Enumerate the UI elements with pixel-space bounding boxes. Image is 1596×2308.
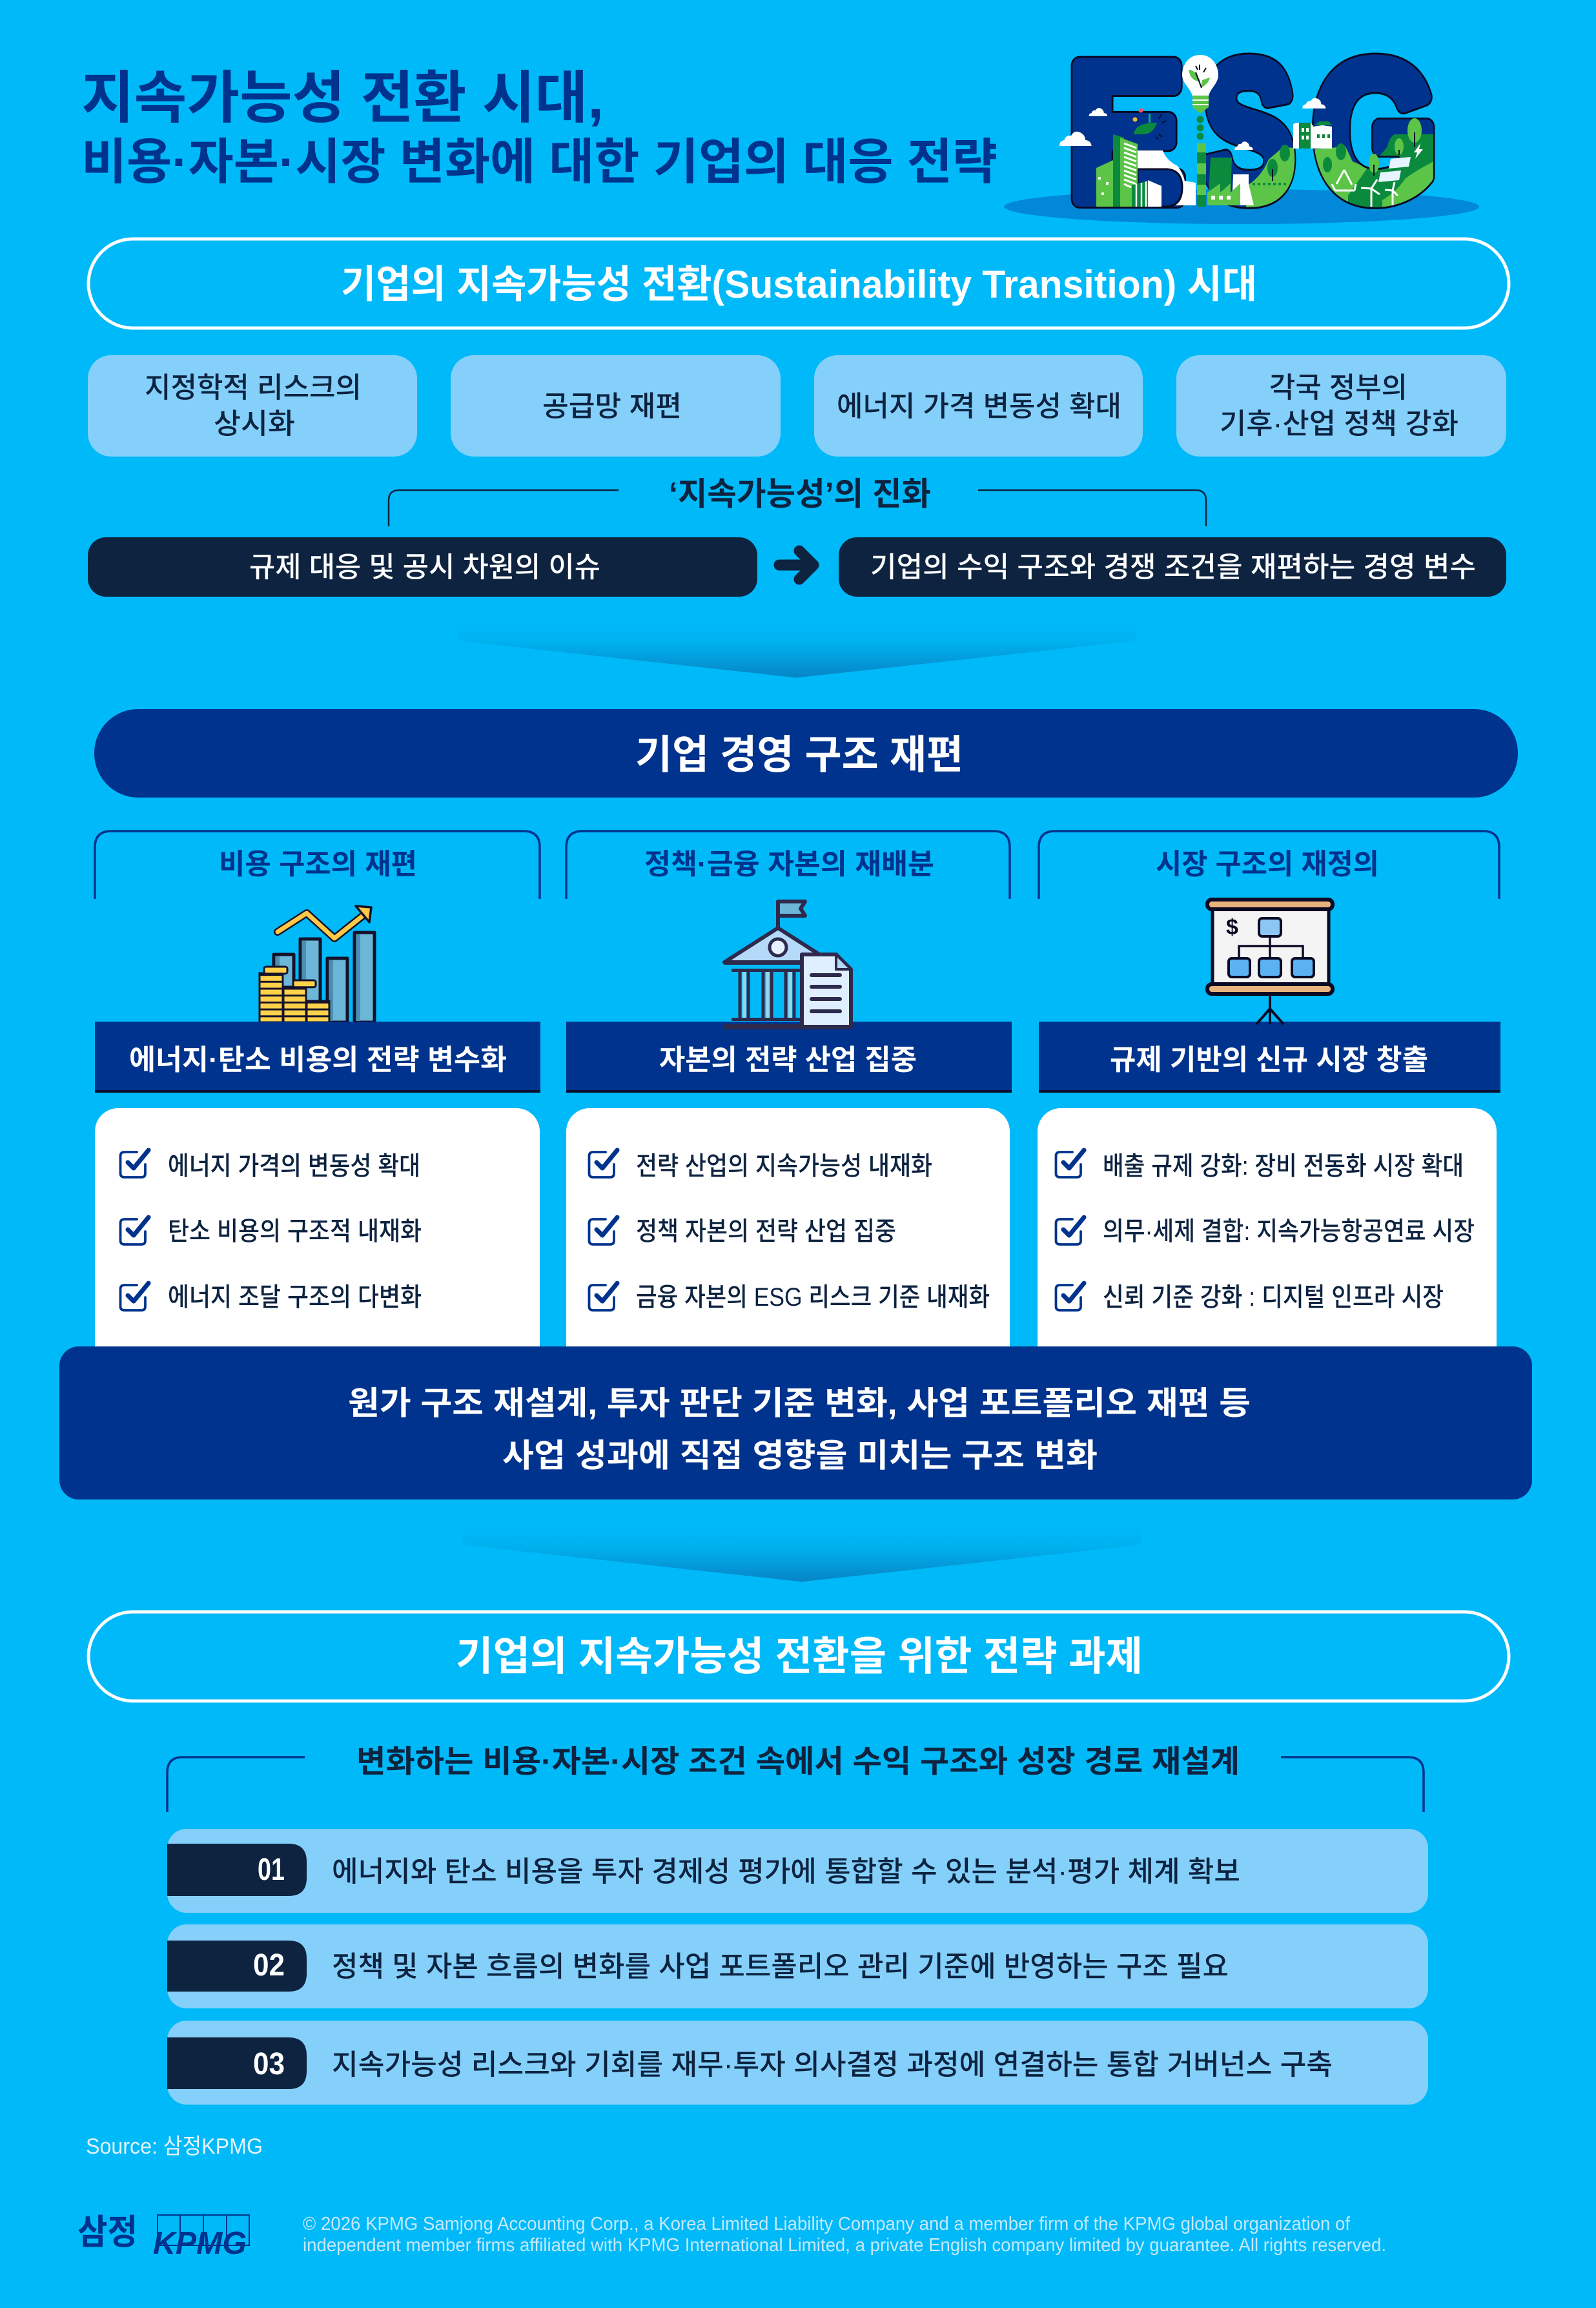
icon: presentation board org chart: $ xyxy=(1226,915,1238,940)
title: 지속가능성 전환 시대, xyxy=(81,66,604,130)
panel: government policy xyxy=(1176,355,1506,457)
heading: evolution of sustainability with bracket xyxy=(389,476,1206,526)
checklist: market: 신뢰 기준 강화 : 디지털 인프라 시장 xyxy=(1103,1283,1444,1312)
icon: ESG illustration: S xyxy=(1203,23,1294,240)
panel: management variable: 기업의 수익 구조와 경쟁 조건을 재편하는 경영 변수 xyxy=(870,551,1476,583)
panel: regulatory issue xyxy=(88,537,757,597)
icon: ESG illustration: G xyxy=(1313,23,1437,240)
checklist: market xyxy=(1038,1108,1497,1379)
checklist: capital: 정책 자본의 전략 산업 집중 xyxy=(636,1217,896,1246)
arrow: downward funnel 2 xyxy=(462,1527,1141,1582)
strip: energy carbon cost: 에너지·탄소 비용의 전략 변수화 xyxy=(129,1044,507,1076)
panel: government policy: 기후·산업 정책 강화 xyxy=(1220,408,1458,440)
panel: market redefinition column xyxy=(1038,831,1500,1379)
houses xyxy=(1293,121,1332,149)
column bracket and heading: 시장 구조의 재정의 xyxy=(1156,849,1379,880)
arrow xyxy=(779,551,813,579)
number tab 03 xyxy=(167,2037,307,2089)
checklist: market: 의무·세제 결합: 지속가능항공연료 시장 xyxy=(1103,1217,1475,1246)
checklist: cost: 탄소 비용의 구조적 내재화 xyxy=(168,1217,422,1246)
trees xyxy=(1267,118,1422,181)
lightning bolt xyxy=(1414,143,1423,159)
number tab 01: 01 xyxy=(258,1853,285,1887)
icon: presentation board org chart xyxy=(1207,900,1333,1024)
number tab 02: 02 xyxy=(253,1948,285,1983)
panel: management variable xyxy=(839,537,1506,597)
panel: task 02 xyxy=(167,1924,1428,2008)
panel: energy price: 에너지 가격 변동성 확대 xyxy=(837,391,1121,422)
copyright text xyxy=(303,2214,1386,2256)
panel: supply chain xyxy=(451,355,781,457)
panel: capital reallocation column xyxy=(566,831,1012,1379)
panel: supply chain: 공급망 재편 xyxy=(542,391,682,422)
icon: ESG illustration: E xyxy=(1068,25,1184,240)
tall building xyxy=(1096,134,1161,207)
title xyxy=(81,66,998,190)
icon: government building with document xyxy=(723,902,851,1029)
solar panels xyxy=(1378,157,1411,182)
clouds xyxy=(1059,98,1326,150)
column bracket and heading xyxy=(95,831,540,899)
panel: geopolitical risk xyxy=(88,355,417,457)
icon: ESG illustration: E xyxy=(1068,25,1184,240)
column bracket and heading: 비용 구조의 재편 xyxy=(219,849,417,880)
heading: corporate structure pill: 기업 경영 구조 재편 xyxy=(635,733,963,778)
number tab 03: 03 xyxy=(253,2047,285,2081)
source note: Source: 삼정KPMG xyxy=(86,2134,263,2159)
checklist: cost: 에너지 가격의 변동성 확대 xyxy=(168,1152,420,1180)
icon: ESG illustration xyxy=(1004,23,1479,240)
logo: Samjong KPMG: 삼정 xyxy=(77,2213,138,2252)
panel: government policy: 각국 정부의 xyxy=(1269,372,1407,404)
heading: corporate structure pill xyxy=(94,709,1518,798)
icon: ESG illustration: G xyxy=(1313,23,1437,240)
callout: structural change banner: 사업 성과에 직접 영향을 미치는 구조 변화 xyxy=(502,1437,1098,1474)
checklist: market: 배출 규제 강화: 장비 전동화 시장 확대 xyxy=(1103,1152,1464,1180)
panel: task 02: 정책 및 자본 흐름의 변화를 사업 포트폴리오 관리 기준에 반영하는 구조 필요 xyxy=(332,1951,1229,1983)
white mist between E and chimney xyxy=(1138,150,1196,205)
strip: energy carbon cost xyxy=(95,1022,540,1093)
strip: new markets xyxy=(1039,1022,1500,1093)
panel: sustainability transition heading pill: 기업의 지속가능성 전환(Sustainability Transition) 시대 xyxy=(341,263,1257,306)
scene inside letters xyxy=(1246,134,1446,210)
panel: task 01 xyxy=(167,1829,1428,1913)
panel: cost structure column xyxy=(95,831,540,1379)
heading: strategic tasks pill xyxy=(88,1612,1509,1701)
panel: regulatory issue: 규제 대응 및 공시 차원의 이슈 xyxy=(249,551,600,583)
callout: structural change banner xyxy=(59,1346,1532,1499)
callout: structural change banner: 원가 구조 재설계, 투자 판단 기준 변화, 사업 포트폴리오 재편 등 xyxy=(348,1385,1251,1421)
icon: coins and bar chart xyxy=(260,906,374,1022)
heading: redesign subheading with bracket xyxy=(167,1745,1424,1812)
panel: sustainability transition heading pill xyxy=(88,239,1509,328)
strip: capital concentration: 자본의 전략 산업 집중 xyxy=(659,1044,917,1076)
copyright text: © 2026 KPMG Samjong Accounting Corp., a Korea Limited Liability Company and a member firm of the KPMG global organization of xyxy=(303,2214,1351,2234)
logo: Samjong KPMG: KPMG xyxy=(153,2226,247,2261)
heading: redesign subheading with bracket: 변화하는 비용·자본·시장 조건 속에서 수익 구조와 성장 경로 재설계 xyxy=(356,1745,1240,1779)
dotted hedge line xyxy=(1253,183,1286,185)
strip: capital concentration xyxy=(566,1022,1012,1093)
checklist: capital xyxy=(566,1108,1010,1379)
arrow: downward funnel 1 xyxy=(457,623,1136,678)
lightbulb xyxy=(1182,55,1218,139)
column bracket and heading: 정책·금융 자본의 재배분 xyxy=(644,849,934,880)
wind turbines and recycling xyxy=(1332,170,1398,207)
chimney and factory xyxy=(1197,143,1254,207)
panel: task 03 xyxy=(167,2021,1428,2105)
column bracket and heading xyxy=(566,831,1010,899)
panel: geopolitical risk: 지정학적 리스크의 xyxy=(145,372,362,404)
number tab 01 xyxy=(167,1844,307,1896)
checklist: cost: 에너지 조달 구조의 다변화 xyxy=(168,1283,422,1312)
heading: evolution of sustainability with bracket: ‘지속가능성’의 진화 xyxy=(669,476,931,512)
strip: new markets: 규제 기반의 신규 시장 창출 xyxy=(1110,1044,1428,1076)
leaf bird in E xyxy=(1132,108,1166,139)
panel: geopolitical risk: 상시화 xyxy=(214,408,295,440)
checklist: capital: 전략 산업의 지속가능성 내재화 xyxy=(636,1152,932,1180)
number tab 02 xyxy=(167,1941,307,1992)
heading: strategic tasks pill: 기업의 지속가능성 전환을 위한 전략 과제 xyxy=(456,1634,1143,1679)
title: 비용·자본·시장 변화에 대한 기업의 대응 전략 xyxy=(81,135,998,190)
panel: task 03: 지속가능성 리스크와 기회를 재무·투자 의사결정 과정에 연결하는 통합 거버넌스 구축 xyxy=(332,2049,1333,2081)
panel: energy price xyxy=(814,355,1143,457)
logo: Samjong KPMG xyxy=(77,2213,249,2261)
icon: ESG illustration: S xyxy=(1203,23,1294,240)
checklist: capital: 금융 자본의 ESG 리스크 기준 내재화 xyxy=(636,1283,990,1312)
column bracket and heading xyxy=(1039,831,1499,899)
panel: task 01: 에너지와 탄소 비용을 투자 경제성 평가에 통합할 수 있는 분석·평가 체계 확보 xyxy=(332,1856,1240,1888)
checklist: cost xyxy=(95,1108,540,1379)
copyright text: independent member firms affiliated with KPMG International Limited, a private English company limited by guarantee. All rights reserved. xyxy=(303,2235,1386,2256)
